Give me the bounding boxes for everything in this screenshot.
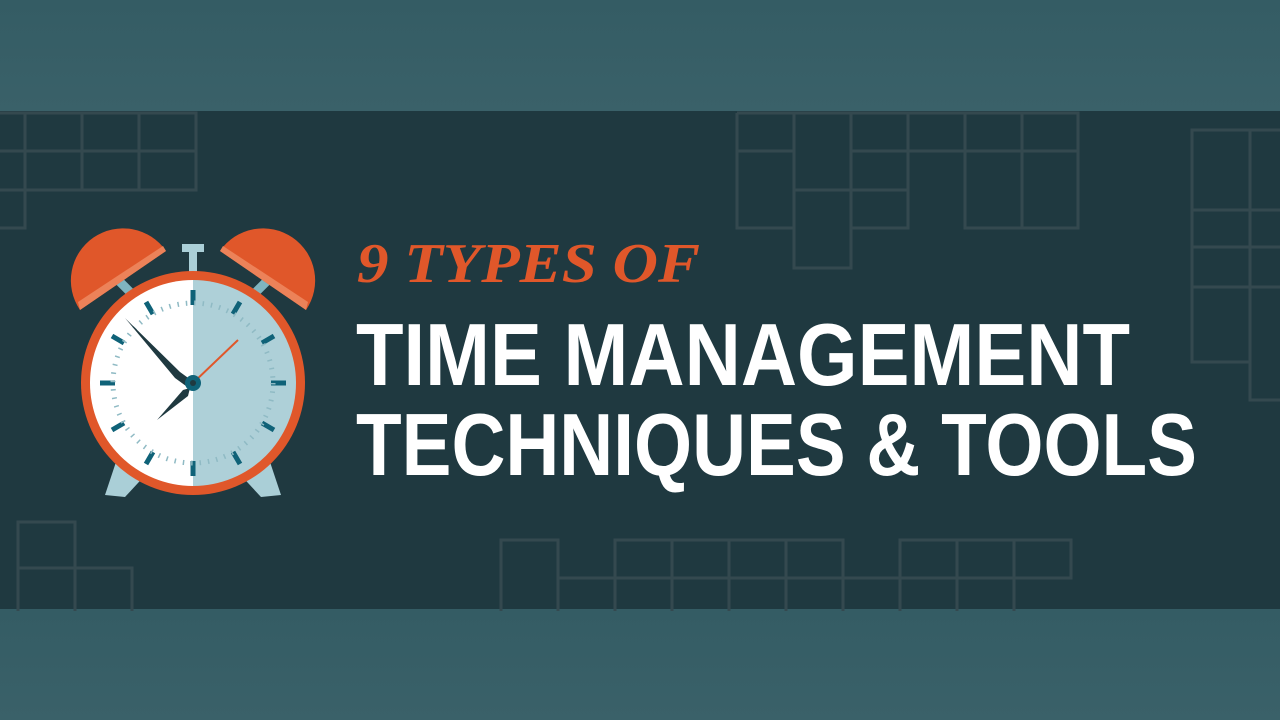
title: 9 types of: 9 TYPES OF: [357, 233, 700, 295]
dark band: [0, 111, 1280, 609]
title: time management: TIME MANAGEMENT: [356, 305, 1130, 404]
icon: alarm clock: [71, 228, 315, 497]
